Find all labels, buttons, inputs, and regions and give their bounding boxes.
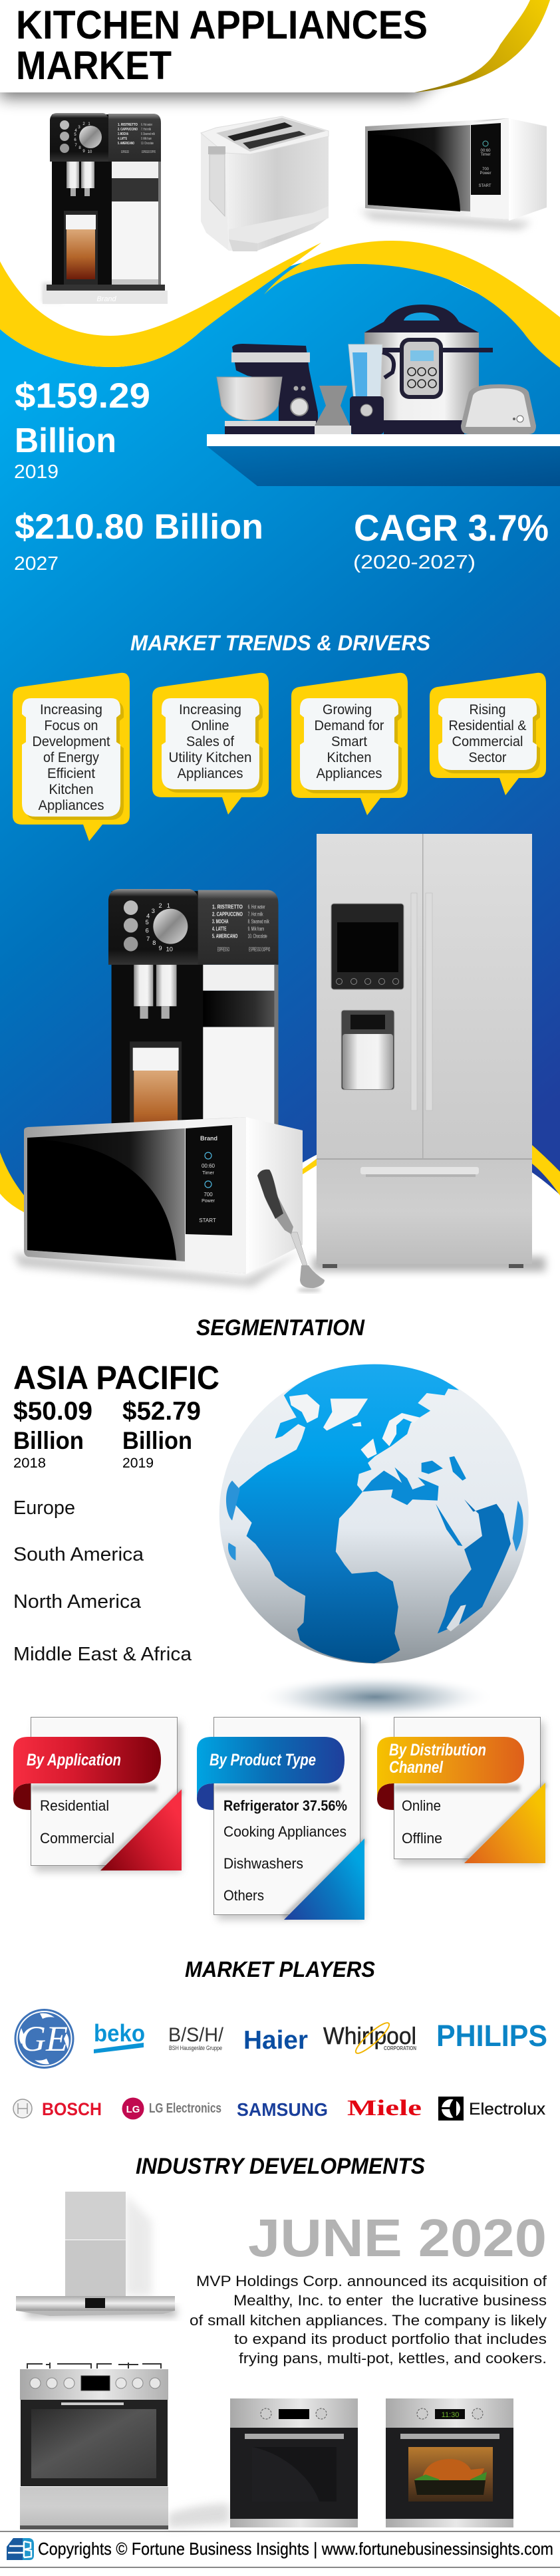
ribbon: By Product Type (210, 1751, 316, 1769)
coffee machine large: 5 (146, 919, 149, 926)
microwave large: Power (202, 1199, 215, 1204)
coffee machine large: 7 (146, 936, 150, 942)
yellow wave: top right hump (264, 241, 560, 368)
coffee machine top: 3. MOCHA (118, 132, 128, 136)
market size stats (14, 376, 549, 575)
logo: BSH: B/S/H/ (168, 2024, 224, 2046)
logo: LG (122, 2097, 221, 2120)
logo: GE (15, 2009, 74, 2069)
coffee machine top (43, 113, 168, 304)
logos (13, 2009, 547, 2121)
asia pacific stats: 2018 (13, 1456, 46, 1471)
stat: CAGR: CAGR 3.7% (354, 507, 549, 549)
callout: smart appliances: Kitchen (327, 750, 371, 765)
microwave top: Timer (480, 153, 491, 157)
callout: energy efficient (13, 673, 130, 841)
coffee machine top: 5 (74, 133, 76, 137)
coffee machine large: 6. Hot water (248, 904, 265, 910)
callout: residential and commercial: Sector (468, 750, 507, 765)
logo: Haier: Haier (243, 2026, 308, 2055)
toaster (201, 116, 329, 251)
panel: by application (13, 1717, 182, 1872)
panel: by distribution channel (377, 1717, 545, 1865)
coffee machine top: Brand (96, 295, 117, 303)
callout: smart appliances: Demand for (314, 718, 384, 733)
callout: residential and commercial (430, 673, 546, 795)
stat: 2019 value (14, 376, 150, 483)
heading: industry developments: INDUSTRY DEVELOPMENTS (136, 2154, 425, 2179)
logo: beko: beko (94, 2019, 145, 2047)
stat: 2027 value (14, 507, 263, 575)
title: KITCHEN APPLIANCES (16, 3, 428, 47)
stat: CAGR: (2020-2027) (353, 552, 476, 573)
shelf (207, 434, 560, 486)
coffee machine large: 8. Steamed milk (248, 918, 269, 924)
corner fold (284, 1839, 364, 1920)
corner fold (464, 1783, 545, 1863)
list: Cooking Appliances (223, 1823, 347, 1840)
list: Online (402, 1797, 441, 1814)
globe shadow (255, 1674, 495, 1720)
coffee machine large: 3. MOCHA (212, 918, 229, 924)
pressure cooker (364, 305, 493, 434)
callout: energy efficient: Development (32, 734, 110, 749)
microwave top (359, 118, 547, 229)
list: Residential (40, 1797, 109, 1814)
asia pacific stats: Billion (122, 1427, 192, 1454)
coffee machine top: 10 (88, 150, 92, 154)
coffee machine large: 10 (166, 946, 173, 953)
range hood (16, 2192, 176, 2317)
coffee machine top: 1 (88, 122, 90, 126)
logo: LG: LG (126, 2104, 140, 2115)
coffee machine top: 10. Chocolate (141, 142, 154, 146)
ribbon (377, 1737, 524, 1810)
oven with roast: 11:30 (442, 2411, 459, 2419)
callout: smart appliances: Smart (331, 734, 367, 749)
development text: frying pans, multi-pot, kettles, and cookers. (239, 2350, 547, 2367)
logo: LG: LG Electronics (149, 2101, 221, 2116)
microwave large: 00:60 (202, 1163, 215, 1169)
asia pacific stats: Billion (13, 1427, 84, 1454)
coffee machine top: 4 (74, 129, 77, 133)
coffee machine large: 2 (158, 902, 162, 909)
coffee machine top: 5. AMERICANO (118, 142, 134, 146)
logo: Bosch: BOSCH (42, 2099, 102, 2119)
stand mixer (217, 344, 319, 434)
coffee machine large: 6 (146, 927, 149, 934)
region list: Middle East & Africa (13, 1644, 192, 1665)
microwave large: START (199, 1218, 216, 1224)
callout: energy efficient: Focus on (44, 718, 98, 733)
footer (0, 2531, 560, 2568)
logo: Electrolux (438, 2097, 546, 2121)
logo: Electrolux: Electrolux (469, 2100, 546, 2119)
callout: energy efficient: Increasing (40, 702, 102, 717)
callout: energy efficient: Kitchen (49, 782, 93, 797)
ribbon: By Application (27, 1751, 121, 1769)
region list: South America (13, 1544, 144, 1565)
hand blender (257, 1170, 325, 1292)
callout: online sales: Online (192, 718, 229, 733)
region list (13, 1497, 192, 1665)
title (16, 3, 428, 88)
list: Offline (402, 1830, 442, 1847)
list (40, 1797, 114, 1847)
coffee machine top: 3 (78, 126, 80, 130)
region list: Europe (13, 1497, 75, 1519)
gas cooker (20, 2363, 229, 2529)
callout: online sales: Appliances (177, 766, 243, 781)
coffee machine large: 5. AMERICANO (212, 932, 238, 939)
coffee machine large: ESPRESSO DOPPIO (249, 947, 270, 953)
asia pacific stats: 2019 (122, 1456, 154, 1471)
corner fold (100, 1789, 182, 1870)
coffee machine top: 8 (78, 146, 81, 150)
callout: online sales: Increasing (179, 702, 241, 717)
title: MARKET (16, 43, 172, 88)
globe (219, 1364, 529, 1664)
yellow wave: top left crescent (0, 243, 321, 367)
logo: Whirlpool: Whirlpool (323, 2022, 416, 2049)
stat: CAGR (353, 507, 549, 573)
oven empty (230, 2398, 358, 2527)
coffee machine top: 6. Hot water (141, 123, 152, 127)
microwave top: Power (480, 172, 491, 176)
stat: 2027 value: 2027 (14, 553, 59, 575)
coffee machine top: 6 (74, 138, 76, 142)
logo: Philips: PHILIPS (436, 2019, 547, 2053)
oven with roast (386, 2398, 513, 2527)
card paper (31, 1717, 177, 1866)
development text: of small kitchen appliances. The company is likely (190, 2312, 547, 2329)
logo: Whirlpool: CORPORATION (384, 2045, 416, 2051)
coffee machine top: 8. Steamed milk (141, 132, 155, 136)
header band (0, 0, 550, 98)
yellow wave: lower right (532, 1145, 560, 1196)
callout: residential and commercial: Commercial (452, 734, 523, 749)
coffee machine top: 7 (74, 144, 77, 148)
callout: smart appliances (291, 673, 408, 815)
coffee machine top: 9. Milk foam (141, 137, 152, 141)
logo: Whirlpool (323, 2019, 416, 2057)
coffee machine large: 9 (158, 945, 162, 952)
asia pacific stats: ASIA PACIFIC (13, 1359, 219, 1396)
callout: energy efficient: Efficient (47, 766, 95, 781)
card paper (394, 1717, 540, 1859)
coffee machine large: 9. Milk foam (248, 926, 264, 932)
coffee machine top: 7. Hot milk (141, 128, 151, 132)
stat: 2027 value: $210.80 Billion (15, 507, 263, 547)
coffee pot (315, 386, 351, 434)
development text: to expand its product portfolio that includes (234, 2331, 547, 2347)
coffee machine large: 10. Chocolate (248, 933, 267, 939)
list: Others (223, 1887, 264, 1904)
coffee machine top: 9 (82, 150, 85, 154)
ribbon: By Distribution (389, 1741, 486, 1759)
coffee machine top: 2. CAPPUCCINO (118, 128, 138, 132)
coffee machine large: 8 (152, 940, 156, 946)
callout: online sales: Sales of (186, 734, 234, 749)
microwave top: 00:60 (480, 149, 491, 153)
yellow wave: lower middle (303, 1158, 317, 1174)
coffee machine large: ESPRESSO (217, 947, 229, 953)
callout: smart appliances: Appliances (317, 766, 382, 781)
coffee machine top: 4. LATTE (118, 137, 127, 141)
development text: Mealthy, Inc. to enter the lucrative business (233, 2292, 547, 2309)
refrigerator (313, 834, 545, 1271)
microwave large: Timer (202, 1171, 214, 1176)
small toaster on shelf (461, 384, 536, 434)
stat: 2019 value: Billion (15, 422, 116, 460)
heading: market players: MARKET PLAYERS (185, 1957, 375, 1982)
date: JUNE 2020 (248, 2208, 547, 2267)
list (402, 1797, 442, 1847)
coffee machine large: 1. RISTRETTO (212, 904, 243, 910)
coffee machine large: 4. LATTE (212, 925, 227, 932)
logo: Samsung: SAMSUNG (237, 2099, 328, 2120)
list: Dishwashers (223, 1855, 303, 1872)
microwave large: Brand (200, 1135, 217, 1142)
microwave large: 700 (204, 1192, 213, 1198)
callout: residential and commercial: Residential & (448, 718, 527, 733)
logo: Miele: Miele (347, 2096, 422, 2121)
stat: 2019 value: 2019 (14, 461, 59, 483)
coffee machine large: 2. CAPPUCCINO (212, 910, 243, 918)
microwave large (13, 1117, 303, 1287)
list: Refrigerator 37.56% (223, 1797, 347, 1814)
asia pacific stats (13, 1359, 219, 1471)
list: Commercial (40, 1830, 114, 1847)
coffee machine large: 1 (167, 902, 170, 909)
panel: by product type (197, 1717, 364, 1920)
callout: online sales (152, 673, 269, 815)
microwave top: START (478, 184, 491, 188)
development text: MVP Holdings Corp. announced its acquisition of (196, 2273, 547, 2289)
coffee machine top: 1. RISTRETTO (118, 123, 138, 127)
heading: segmentation: SEGMENTATION (196, 1315, 365, 1341)
coffee machine top: ESPRESSO (121, 150, 129, 154)
yellow wave: lower left (0, 1152, 25, 1213)
logo: GE: GE (20, 2019, 68, 2059)
microwave top: 700 (482, 168, 490, 172)
asia pacific stats: $50.09 (13, 1397, 92, 1426)
card paper (214, 1717, 360, 1915)
list (223, 1797, 347, 1904)
callout: energy efficient: Appliances (39, 798, 104, 813)
blender (349, 344, 394, 434)
coffee machine large: 4 (146, 913, 150, 920)
callout: online sales: Utility Kitchen (169, 750, 251, 765)
coffee machine large: 3 (152, 908, 155, 914)
ribbon: Channel (389, 1758, 444, 1777)
logo: Bosch (13, 2099, 102, 2119)
coffee machine large (108, 889, 279, 1161)
logo: BSH: BSH Hausgeräte Gruppe (169, 2045, 222, 2052)
ribbon (197, 1737, 345, 1810)
heading: market trends: MARKET TRENDS & DRIVERS (130, 631, 431, 655)
region list: North America (13, 1591, 142, 1612)
callout: smart appliances: Growing (323, 702, 372, 717)
logo: Fortune Business Insights (7, 2538, 34, 2560)
development text (190, 2273, 547, 2367)
coffee machine large: 7. Hot milk (248, 911, 263, 918)
coffee machine top: 2 (82, 122, 85, 126)
coffee machine top: ESPRESSO DOPPIO (142, 150, 156, 154)
blue background wave (0, 253, 560, 1225)
callout: residential and commercial: Rising (470, 702, 505, 717)
asia pacific stats: $52.79 (122, 1397, 201, 1426)
ribbon (13, 1737, 161, 1810)
stat: 2019 value: $159.29 (15, 376, 150, 416)
callout: energy efficient: of Energy (43, 750, 99, 765)
